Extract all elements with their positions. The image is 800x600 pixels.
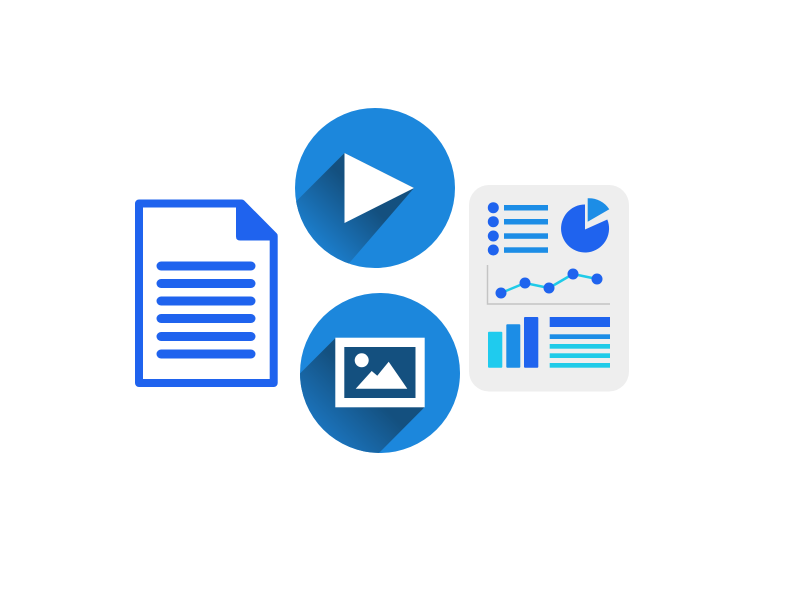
- icon: image picture: [300, 293, 460, 453]
- picture inner background: [344, 347, 416, 398]
- document folded corner: [236, 202, 278, 240]
- bulleted list: [488, 202, 548, 256]
- icon: document: [139, 202, 278, 383]
- play button long shadow: [296, 153, 414, 264]
- play triangle: [344, 153, 414, 223]
- document text lines: [156, 262, 256, 358]
- picture sun: [355, 353, 369, 367]
- pie chart: [561, 198, 609, 252]
- bar chart: [488, 317, 538, 368]
- picture frame: [335, 338, 425, 407]
- icon: video play button: [295, 108, 455, 268]
- table block: [550, 317, 610, 368]
- line chart: [488, 265, 610, 304]
- picture mountains: [356, 362, 407, 389]
- infographic canvas: [135, 108, 629, 453]
- panel: charts report card: [469, 185, 629, 392]
- picture long shadow: [300, 338, 424, 453]
- pie slice: [588, 198, 609, 222]
